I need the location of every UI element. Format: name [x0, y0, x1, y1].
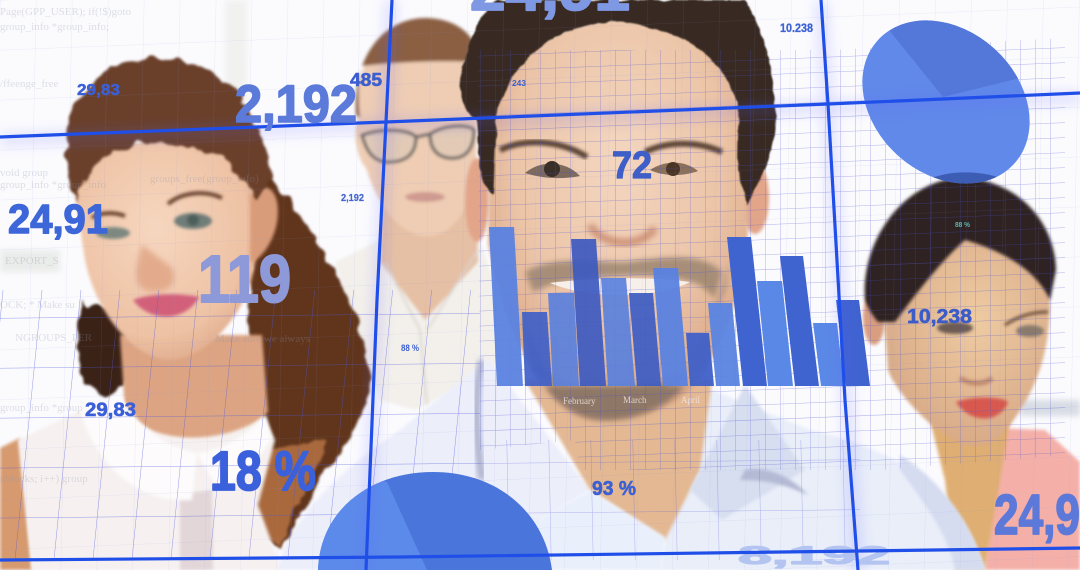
number: 10,238: 10,238: [907, 306, 972, 328]
right woman neck: [925, 400, 1010, 570]
bar chart: [489, 227, 870, 386]
number: 2,192 small: 2,192: [341, 193, 364, 204]
left woman ear: [250, 187, 278, 262]
back man mouth: [405, 192, 445, 202]
faint code text: group_info *group: [0, 402, 83, 414]
coarse grid lower centre: [480, 440, 860, 560]
left woman lips: [133, 294, 199, 317]
right woman ear: [863, 291, 885, 345]
faint code text: NGROUPS_PER: [15, 332, 93, 344]
central man collar: [537, 490, 665, 570]
person: left woman: [0, 58, 370, 570]
back man head: [356, 20, 478, 236]
bottom pie light wedge: [318, 481, 427, 570]
faint code text: /ffeenge_free: [0, 78, 59, 90]
left woman blouse pleat: [180, 490, 213, 570]
top pie body: [829, 0, 1063, 217]
top pie dark wedge: [890, 20, 1018, 97]
left woman top hair: [66, 58, 272, 200]
top pie hair overlap: [933, 172, 997, 184]
bar chart month labels: March: [623, 395, 647, 405]
person: central man: [278, 0, 985, 570]
left woman right hair mass: [248, 170, 370, 550]
number: 24,91 left: 24,91: [8, 196, 108, 242]
faint code text: Page(GPP_USER); if(!$)goto: [0, 6, 132, 18]
number: 88 %: 88 %: [401, 343, 419, 353]
central man eyebrows: [500, 142, 722, 157]
faint code text: group_info *group_info: [0, 179, 107, 191]
number: 10.238 top: 10.238: [780, 21, 813, 35]
bottom pie body: [318, 472, 552, 570]
number: 29,83 upper: 29,83: [77, 82, 120, 99]
central man neck: [525, 380, 712, 540]
faint code text: EXPORT_S: [5, 255, 59, 267]
left woman eyebrows: [92, 193, 222, 218]
pie chart bottom: [318, 472, 552, 570]
number: 119: 119: [198, 242, 291, 317]
person: right woman: [863, 178, 1080, 570]
left woman eyes: [96, 213, 212, 239]
number: 93 %: 93 %: [592, 478, 636, 500]
back man hair: [356, 18, 478, 118]
person: back man: [335, 18, 500, 410]
back man glasses: [362, 126, 474, 162]
left woman left curls: [77, 300, 135, 395]
central man nose shadow: [590, 225, 655, 242]
faint code text: OCK; * Make su: [0, 299, 75, 311]
left woman blouse: [18, 408, 282, 570]
right woman face: [885, 235, 1050, 446]
central man stubble: [520, 260, 730, 400]
number: 88 % teal: 88 %: [955, 222, 971, 229]
number: 2,192 large: 2,192: [235, 75, 357, 134]
right woman hair: [865, 178, 1056, 322]
number: 485: 485: [350, 70, 382, 90]
central man teeth: [550, 278, 690, 295]
faint code text: groups_free(group_info): [150, 173, 259, 185]
blurred room details: [0, 0, 1080, 416]
right woman features: [937, 312, 1048, 418]
right woman top: [985, 428, 1080, 570]
left woman face: [72, 140, 258, 360]
central man shirt right: [660, 385, 985, 570]
central man hair: [460, 0, 775, 205]
central man face: [488, 20, 748, 420]
central man eyes: [525, 164, 580, 178]
number: 8,192 bottom: 8,192: [738, 542, 890, 570]
left woman arm: [0, 438, 32, 570]
number: 243: 243: [512, 79, 527, 88]
central man features: [500, 142, 730, 420]
central man collar fold: [477, 360, 482, 480]
left woman hair lower orange: [256, 440, 330, 548]
back man neck: [380, 190, 478, 320]
central man shirt shading: [690, 385, 805, 520]
faint code text: group_info *group_info;: [0, 21, 109, 33]
number: 18 %: 18 %: [210, 439, 316, 502]
faint code text: [0, 6, 310, 485]
bar chart month labels: April: [681, 395, 700, 405]
pie chart top right: [862, 20, 1030, 184]
left woman neck: [120, 335, 268, 438]
left woman nose: [136, 245, 174, 292]
number: 29,83: 29,83: [85, 400, 136, 421]
fine grid: [478, 38, 1065, 470]
faint code text: void group: [0, 167, 48, 179]
faint code text: nblocks; i++) group: [0, 473, 88, 485]
bar chart month labels: [563, 395, 700, 406]
left woman collar: [80, 395, 272, 500]
central man ears: [465, 158, 769, 242]
central man shirt left: [278, 358, 590, 570]
bar chart month labels: February: [563, 396, 596, 406]
number: 72: 72: [612, 145, 652, 187]
central man moustache: [525, 257, 722, 298]
coarse grid lower left: [0, 290, 480, 560]
back man shirt: [335, 240, 500, 410]
faint code text: Make sure we always: [215, 333, 310, 345]
central man chin beard: [545, 386, 685, 420]
